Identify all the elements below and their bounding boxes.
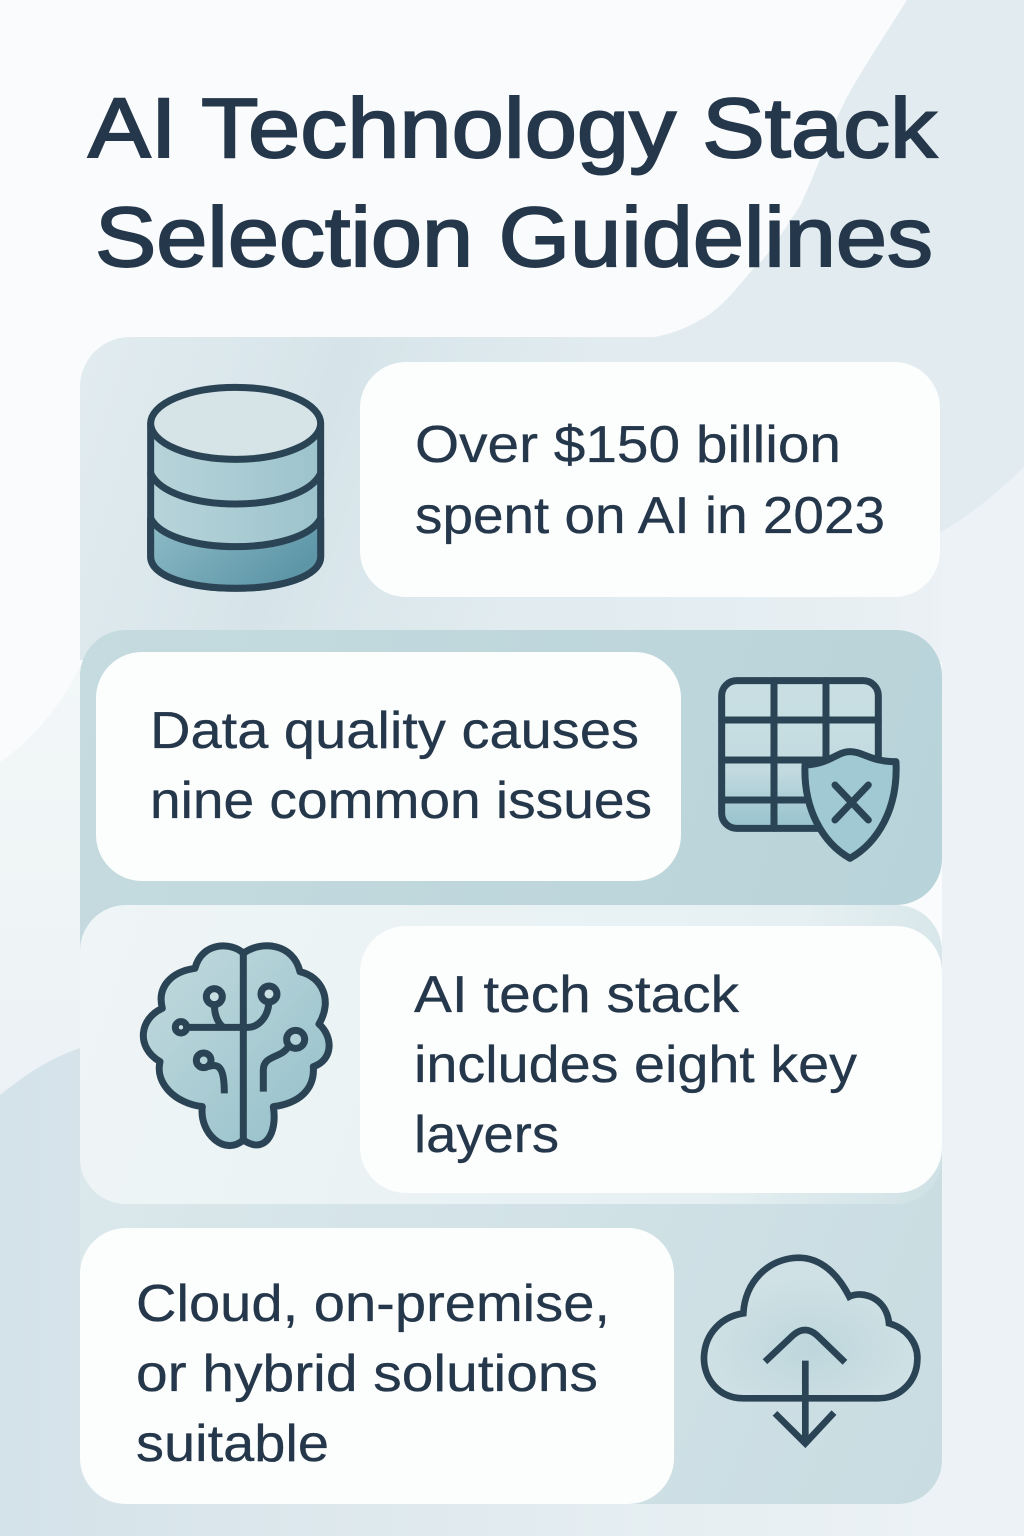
card background — [360, 926, 942, 1193]
card text: or hybrid solutions — [136, 1345, 598, 1403]
card text — [136, 1275, 610, 1473]
background band: left margin — [0, 666, 200, 1536]
main stack of panels — [80, 337, 942, 1504]
icon: table with shield — [722, 681, 896, 858]
card text: includes eight key — [414, 1036, 857, 1094]
card text: Cloud, on-premise, — [136, 1275, 610, 1333]
card background — [96, 652, 681, 881]
card text — [414, 966, 857, 1164]
icon: brain with circuit — [143, 946, 329, 1146]
card text: AI tech stack — [414, 966, 740, 1024]
background swoosh: lower left — [0, 1048, 942, 1536]
title: AI Technology Stack — [88, 81, 938, 175]
panel: row 1 backdrop — [80, 337, 942, 660]
row 1: spending card — [360, 362, 940, 597]
card text: spent on AI in 2023 — [415, 487, 885, 545]
icon: cloud with arrows — [704, 1258, 917, 1445]
title: Selection Guidelines — [95, 190, 933, 284]
card text: nine common issues — [150, 772, 652, 830]
icon: database cylinder — [151, 387, 321, 588]
card text — [150, 702, 652, 830]
card background — [360, 362, 940, 597]
panel: row 1 lower right fade — [500, 532, 942, 662]
panel: row 4 backdrop — [80, 1150, 942, 1504]
row 3: tech stack card — [360, 926, 942, 1193]
row 4: deployment card — [80, 1228, 674, 1504]
card text: Over $150 billion — [415, 416, 841, 474]
card text: Data quality causes — [150, 702, 639, 760]
panel: row 3 backdrop — [80, 905, 942, 1204]
card background — [80, 1228, 674, 1504]
card text: suitable — [136, 1415, 329, 1473]
background band: right margin — [942, 440, 1024, 1536]
row 2: data quality card — [96, 652, 681, 881]
card text — [415, 416, 885, 545]
panel: row 2 backdrop — [80, 630, 942, 990]
background swoosh: upper right — [500, 0, 1024, 560]
title — [88, 81, 938, 284]
card text: layers — [414, 1106, 559, 1164]
